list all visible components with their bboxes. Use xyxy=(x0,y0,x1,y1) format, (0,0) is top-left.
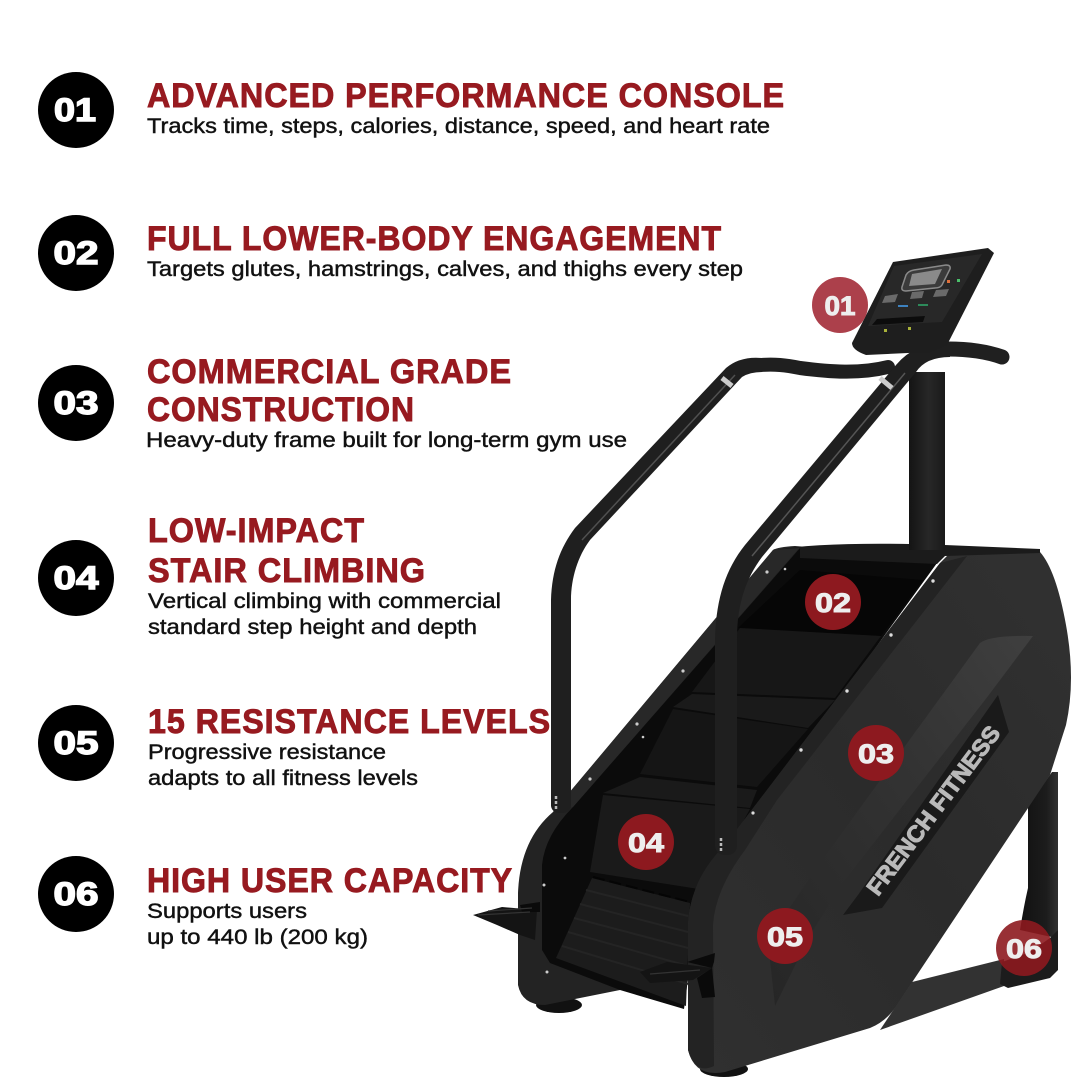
description 06: Supports users xyxy=(147,899,307,923)
feature 03 xyxy=(38,353,627,452)
heading 06: HIGH USER CAPACITY xyxy=(147,862,513,900)
number badge 04 xyxy=(38,540,114,616)
top opening xyxy=(738,570,923,636)
step lip 2 xyxy=(603,777,757,808)
rear handrail xyxy=(551,358,888,813)
main side panel xyxy=(688,552,1071,1073)
heading 03: CONSTRUCTION xyxy=(147,391,415,429)
description 04 xyxy=(148,589,501,639)
marker 06 xyxy=(996,920,1052,976)
heading 01: ADVANCED PERFORMANCE CONSOLE xyxy=(147,77,785,115)
description 03: Heavy-duty frame built for long-term gym use xyxy=(146,428,627,452)
heading 04 xyxy=(148,512,426,590)
feature 02 xyxy=(38,215,743,291)
console keys xyxy=(882,279,960,332)
brand text: FRENCH FITNESS xyxy=(861,721,1005,900)
step lip 1 xyxy=(673,694,835,728)
number badge 05 xyxy=(38,705,114,781)
top cover xyxy=(773,544,1040,564)
feature 05 xyxy=(38,703,551,790)
number badge 03: 03 xyxy=(54,385,98,421)
description 05 xyxy=(148,740,418,790)
description 06 xyxy=(147,899,368,949)
feature 01 xyxy=(38,72,785,148)
foot pads xyxy=(536,997,748,1077)
feature 04 xyxy=(38,512,501,639)
description 02: Targets glutes, hamstrings, calves, and thighs every step xyxy=(147,257,743,281)
marker 02: 02 xyxy=(815,588,851,618)
left side frame xyxy=(518,546,820,1005)
description 04: standard step height and depth xyxy=(148,615,477,639)
recessed light band xyxy=(770,636,1033,1006)
number badge 06: 06 xyxy=(54,876,98,912)
ribbed bottom tread xyxy=(556,877,690,1006)
console xyxy=(852,248,994,355)
marker 04: 04 xyxy=(628,828,664,858)
number badge 06 xyxy=(38,856,114,932)
marker 03 xyxy=(848,725,904,781)
step riser 1 xyxy=(692,628,881,698)
front handrail xyxy=(715,342,1002,855)
description 04: Vertical climbing with commercial xyxy=(148,589,501,613)
heading 02: FULL LOWER-BODY ENGAGEMENT xyxy=(147,220,722,258)
marker 04 xyxy=(618,814,674,870)
description 05: Progressive resistance xyxy=(148,740,386,764)
description 06: up to 440 lb (200 kg) xyxy=(147,925,368,949)
heading 05: 15 RESISTANCE LEVELS xyxy=(148,703,551,741)
description 05: adapts to all fitness levels xyxy=(148,766,418,790)
feature 06 xyxy=(38,856,513,949)
footplate right xyxy=(640,953,715,998)
number badge 01: 01 xyxy=(54,92,96,128)
heading 04: STAIR CLIMBING xyxy=(148,552,426,590)
feature list xyxy=(38,72,785,949)
marker 01: 01 xyxy=(824,291,856,321)
marker 06: 06 xyxy=(1006,934,1042,964)
marker 05: 05 xyxy=(767,922,803,952)
left diagonal frame strip with bolts xyxy=(542,547,800,974)
number badge 03 xyxy=(38,365,114,441)
heading 03 xyxy=(147,353,512,429)
marker 02 xyxy=(805,574,861,630)
number badge 01 xyxy=(38,72,114,148)
emblem plate xyxy=(843,695,1009,915)
panel bolts xyxy=(751,579,935,815)
rear strut and base bar xyxy=(880,772,1058,1030)
marker 01 xyxy=(812,277,868,333)
console display xyxy=(902,265,950,291)
step riser 3 xyxy=(590,795,750,890)
heading 04: LOW-IMPACT xyxy=(148,512,365,550)
marker 05 xyxy=(757,908,813,964)
number badge 05: 05 xyxy=(54,725,98,761)
stair climber machine xyxy=(473,248,1071,1077)
number badge 02 xyxy=(38,215,114,291)
console column xyxy=(909,372,945,550)
machine callouts xyxy=(618,277,1052,976)
number badge 04: 04 xyxy=(54,560,99,596)
stair well xyxy=(542,548,945,1009)
front edge strip xyxy=(688,556,967,1068)
step riser 2 xyxy=(640,709,808,787)
footplate left xyxy=(473,902,540,940)
number badge 02: 02 xyxy=(54,235,98,271)
description 01: Tracks time, steps, calories, distance, speed, and heart rate xyxy=(147,114,770,138)
marker 03: 03 xyxy=(858,739,894,769)
heading 03: COMMERCIAL GRADE xyxy=(147,353,512,391)
